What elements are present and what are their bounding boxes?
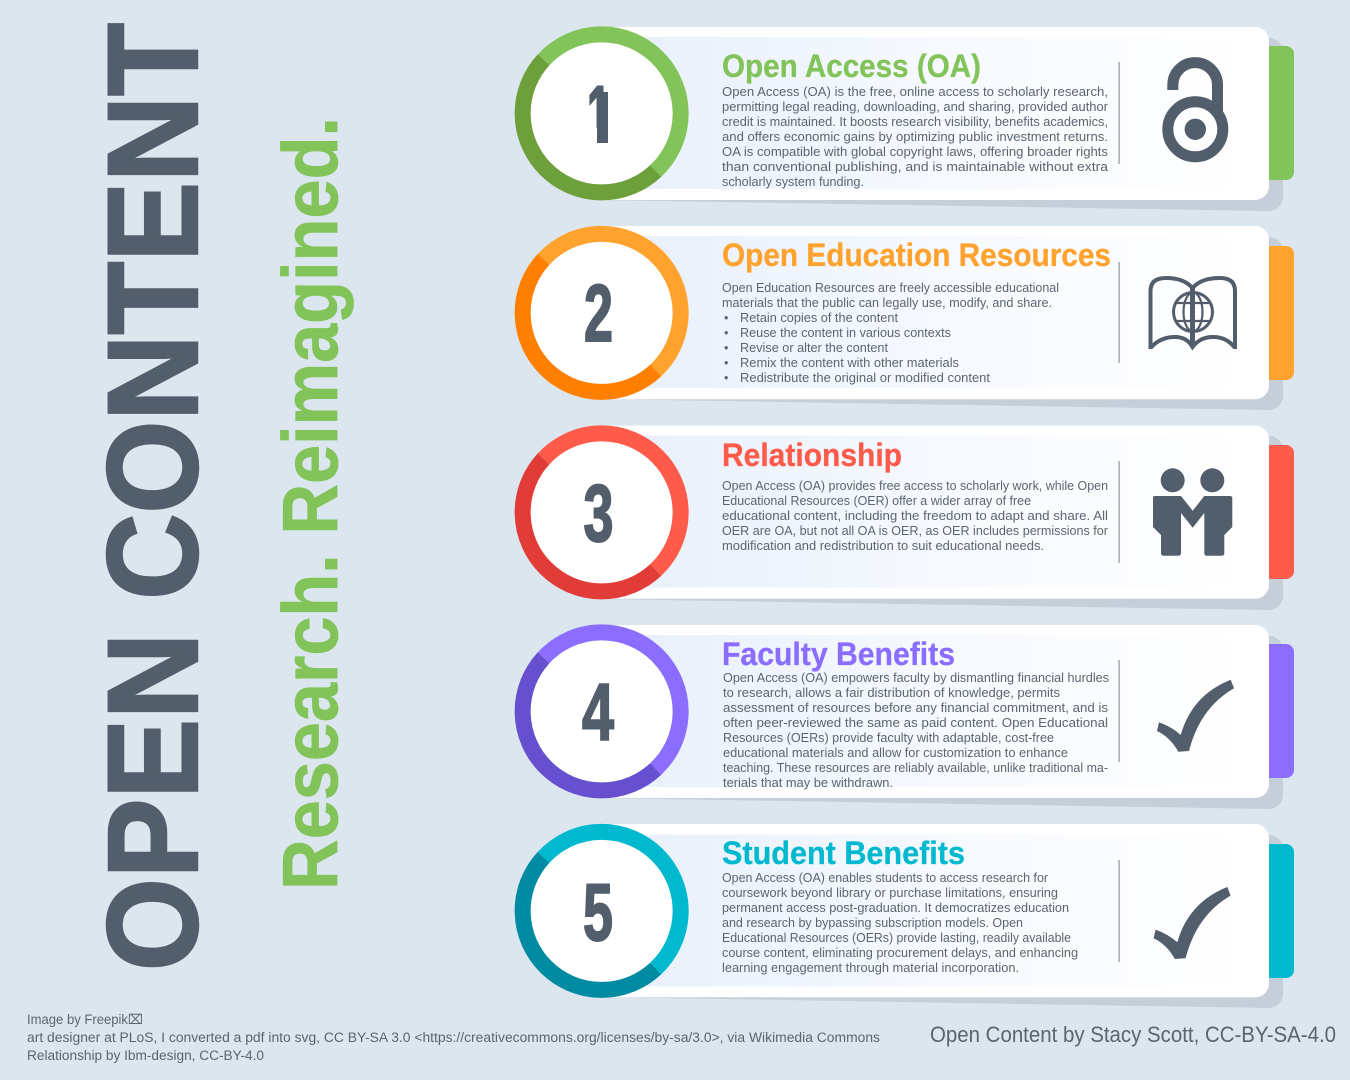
body text 2: Revise or alter the content (740, 341, 888, 355)
heading 5: Student Benefits (722, 835, 965, 871)
body text 1: credit is maintained. It boosts research visibility, benefits academics, (722, 115, 1108, 129)
body text 5: and research by bypassing subscription models. Open (722, 916, 1023, 930)
number ring 2: 2 (584, 269, 613, 359)
image credits: Relationship by Ibm-design, CC-BY-4.0 (27, 1048, 264, 1063)
image credits (27, 1012, 880, 1063)
body text 4: educational materials and allow for customization to enhance (723, 746, 1068, 760)
body text 4: Open Access (OA) empowers faculty by dismantling financial hurdles (723, 671, 1109, 685)
body text 4 (723, 671, 1109, 790)
body text 4: to research, allows a fair distribution of knowledge, permits (723, 686, 1060, 700)
number ring 1 (523, 34, 681, 192)
body text 2: Reuse the content in various contexts (740, 326, 951, 340)
body text 3: Open Access (OA) provides free access to scholarly work, while Open (722, 479, 1108, 493)
body text 2: • (724, 341, 728, 355)
body text 1: permitting legal reading, downloading, and sharing, provided author (722, 100, 1108, 114)
body text 1 (722, 85, 1108, 189)
body text 4: Resources (OERs) provide faculty with adaptable, cost-free (723, 731, 1054, 745)
panel 1: Open Access (523, 27, 1294, 211)
heading 4: Faculty Benefits (722, 636, 955, 672)
body text 2: Open Education Resources are freely accessible educational (722, 281, 1059, 295)
body text 2: • (724, 326, 728, 340)
heading 3: Relationship (722, 437, 902, 473)
panel 4: Faculty Benefits (523, 625, 1294, 809)
body text 4: assessment of resources before any financial commitment, and is (723, 701, 1108, 715)
body text 4: terials that may be withdrawn. (723, 776, 893, 790)
number ring 2 (523, 234, 681, 392)
body text 4: often peer-reviewed the same as paid content. Open Educational (723, 716, 1108, 730)
body text 2: • (724, 371, 728, 385)
body text 2: Redistribute the original or modified content (740, 371, 991, 385)
image credits: art designer at PLoS, I converted a pdf into svg, CC BY-SA 3.0 <https://creativecommons.org/licenses/by-sa/3.0>, via Wikimedia Commons (27, 1030, 880, 1045)
number ring 1: 1 (587, 70, 611, 160)
body text 3: OER are OA, but not all OA is OER, as OER includes permissions for (722, 524, 1108, 538)
body text 1: OA is compatible with global copyright laws, offering broader rights (722, 145, 1108, 159)
body text 2: Retain copies of the content (740, 311, 899, 325)
body text 5: Open Access (OA) enables students to access research for (722, 871, 1048, 885)
body text 2: Remix the content with other materials (740, 356, 959, 370)
panel 5: Student Benefits (523, 824, 1294, 1008)
body text 1: and offers economic gains by optimizing public investment returns. (722, 130, 1108, 144)
number ring 4: 4 (582, 668, 614, 758)
body text 3: modification and redistribution to suit educational needs. (722, 539, 1044, 553)
heading 1: Open Access (OA) (722, 48, 981, 84)
body text 3: educational content, including the freedom to adapt and share. All (722, 509, 1108, 523)
body text 4: teaching. These resources are reliably available, unlike traditional ma- (723, 761, 1108, 775)
icon: open book with globe (1150, 278, 1235, 349)
body text 3: Educational Resources (OER) offer a wider array of free (722, 494, 1031, 508)
number ring 3: 3 (584, 469, 614, 559)
panel 2: Open Education Resources (523, 226, 1294, 410)
body text 5: learning engagement through material incorporation. (722, 961, 1019, 975)
number ring 3 (523, 433, 681, 591)
icon: open access lock (1168, 63, 1223, 157)
number ring 5 (523, 832, 681, 990)
body text 2: materials that the public can legally use, modify, and share. (722, 296, 1052, 310)
icon: two people holding hands (1153, 468, 1232, 556)
body text 5: coursework beyond library or purchase limitations, ensuring (722, 886, 1058, 900)
number ring 5: 5 (583, 868, 613, 958)
number ring 4 (523, 632, 681, 790)
body text 1: Open Access (OA) is the free, online access to scholarly research, (722, 85, 1108, 99)
body text 5 (722, 871, 1078, 975)
heading 2: Open Education Resources (722, 237, 1111, 273)
panel 3: Relationship (523, 426, 1294, 610)
body text 5: course content, eliminating procurement delays, and enhancing (722, 946, 1078, 960)
image credits: Image by Freepik⌧ (27, 1012, 143, 1027)
body text 5: permanent access post-graduation. It democratizes education (722, 901, 1069, 915)
subtitle: Research. Reimagined.: Research. Reimagined. (266, 117, 354, 890)
icon: check mark (1154, 887, 1231, 959)
body text 5: Educational Resources (OERs) provide lasting, readily available (722, 931, 1071, 945)
body text 1: scholarly system funding. (722, 175, 864, 189)
body text 2: • (724, 311, 728, 325)
body text 2 (722, 281, 1059, 385)
body text 1: than conventional publishing, and is maintainable without extra (722, 160, 1108, 174)
body text 3 (722, 479, 1108, 553)
body text 2: • (724, 356, 728, 370)
icon: check mark (1157, 680, 1234, 752)
